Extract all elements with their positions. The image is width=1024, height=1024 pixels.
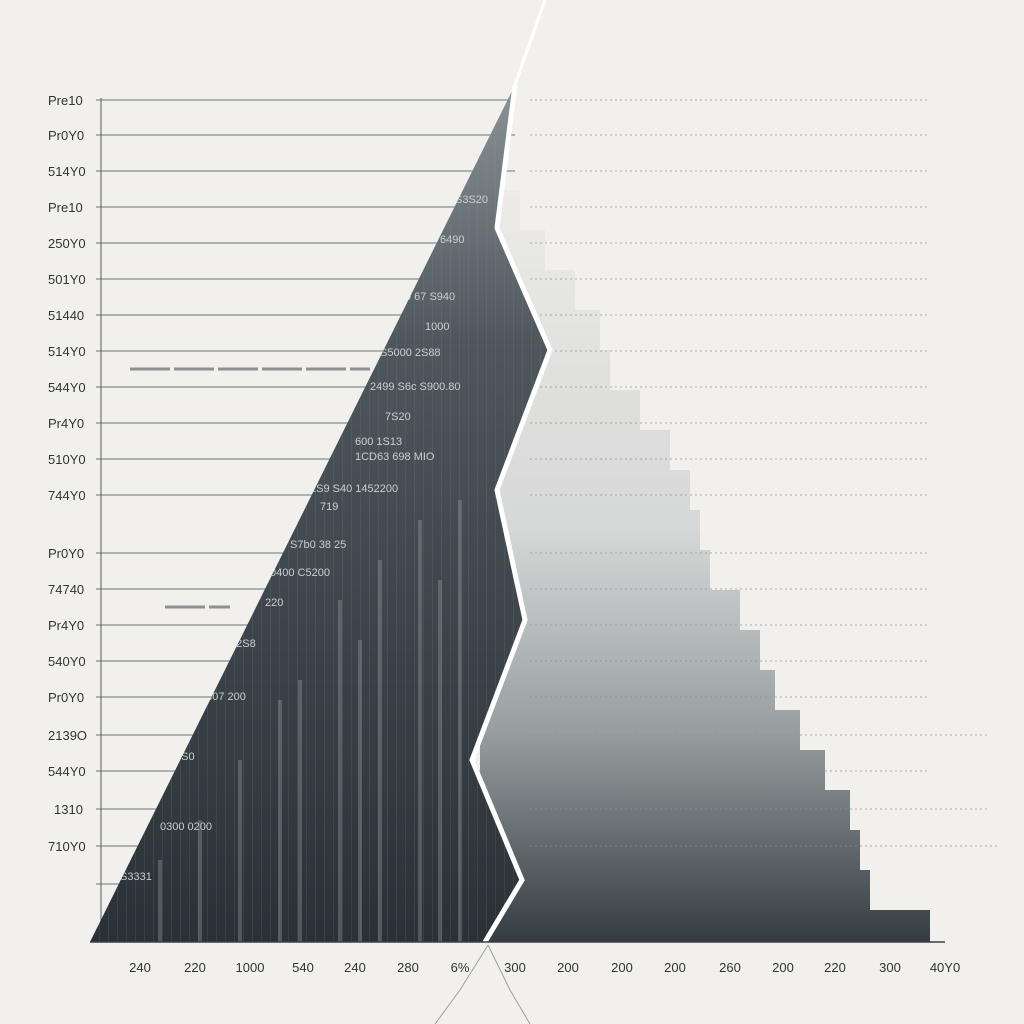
y-axis labels: Pre10 <box>48 200 83 215</box>
y-axis labels: 544Y0 <box>48 764 86 779</box>
x-axis labels: 200 <box>557 960 579 975</box>
x-axis labels: 280 <box>397 960 419 975</box>
dark triangle: 0400 C5200 <box>270 567 330 579</box>
x-axis <box>90 941 945 943</box>
dotted lines right <box>530 100 1000 846</box>
dark triangle: S7b0 38 25 <box>290 539 346 551</box>
x-axis labels: 300 <box>879 960 901 975</box>
y-axis labels: Pr0Y0 <box>48 128 84 143</box>
white crack <box>472 85 550 942</box>
y-axis labels: 514Y0 <box>48 344 86 359</box>
y-axis labels: Pr4Y0 <box>48 618 84 633</box>
y-axis labels <box>48 93 87 854</box>
dark triangle: 719 <box>320 501 338 513</box>
y-axis labels: 510Y0 <box>48 452 86 467</box>
y-axis labels: 501Y0 <box>48 272 86 287</box>
y-axis labels: Pr4Y0 <box>48 416 84 431</box>
dark triangle: 1S0 <box>175 751 195 763</box>
x-axis labels: 260 <box>719 960 741 975</box>
y-axis labels: 540Y0 <box>48 654 86 669</box>
dark triangle: 7S20 <box>385 411 411 423</box>
dark triangle: 6490 <box>440 234 464 246</box>
y-axis labels: 710Y0 <box>48 839 86 854</box>
dark triangle: 0300 0200 <box>160 821 212 833</box>
dark triangle: S3S20 <box>455 194 488 206</box>
y-axis labels: Pr0Y0 <box>48 546 84 561</box>
x-axis labels <box>129 960 960 975</box>
y-axis labels: Pre10 <box>48 93 83 108</box>
dark triangle: 22S8 <box>230 638 256 650</box>
x-axis labels: 300 <box>504 960 526 975</box>
right stepped bars <box>480 190 930 942</box>
x-axis labels: 540 <box>292 960 314 975</box>
dark triangle: 220 <box>265 597 283 609</box>
dark triangle: 1CD63 698 MIO <box>355 451 435 463</box>
dark triangle: S5000 2S88 <box>380 347 441 359</box>
x-axis labels: 240 <box>129 960 151 975</box>
dark triangle: 1S9 S40 1452200 <box>310 483 398 495</box>
grid lines <box>96 98 515 942</box>
dark triangle: 2499 S6c S900.80 <box>370 381 461 393</box>
y-axis labels: 74740 <box>48 582 84 597</box>
x-axis labels: 200 <box>664 960 686 975</box>
x-axis labels: 40Y0 <box>930 960 960 975</box>
x-axis labels: 200 <box>772 960 794 975</box>
x-axis labels: 220 <box>184 960 206 975</box>
x-axis labels: 6% <box>451 960 470 975</box>
y-axis labels: Pr0Y0 <box>48 690 84 705</box>
dark triangle: 1307 200 <box>200 691 246 703</box>
dark triangle: 0 67 S940 <box>405 291 455 303</box>
y-axis labels: 1310 <box>54 802 83 817</box>
dark triangle: S3331 <box>120 871 152 883</box>
y-axis labels: 544Y0 <box>48 380 86 395</box>
x-axis labels: 1000 <box>236 960 264 975</box>
y-axis labels: 250Y0 <box>48 236 86 251</box>
y-axis labels: 2139O <box>48 728 87 743</box>
dark triangle <box>80 80 560 950</box>
x-axis labels: 200 <box>611 960 633 975</box>
x-axis labels: 240 <box>344 960 366 975</box>
y-axis labels: 51440 <box>48 308 84 323</box>
dark triangle: 600 1S13 <box>355 436 402 448</box>
x-axis labels: 220 <box>824 960 846 975</box>
dark triangle: 1000 <box>425 321 449 333</box>
y-axis labels: 514Y0 <box>48 164 86 179</box>
y-axis labels: 744Y0 <box>48 488 86 503</box>
